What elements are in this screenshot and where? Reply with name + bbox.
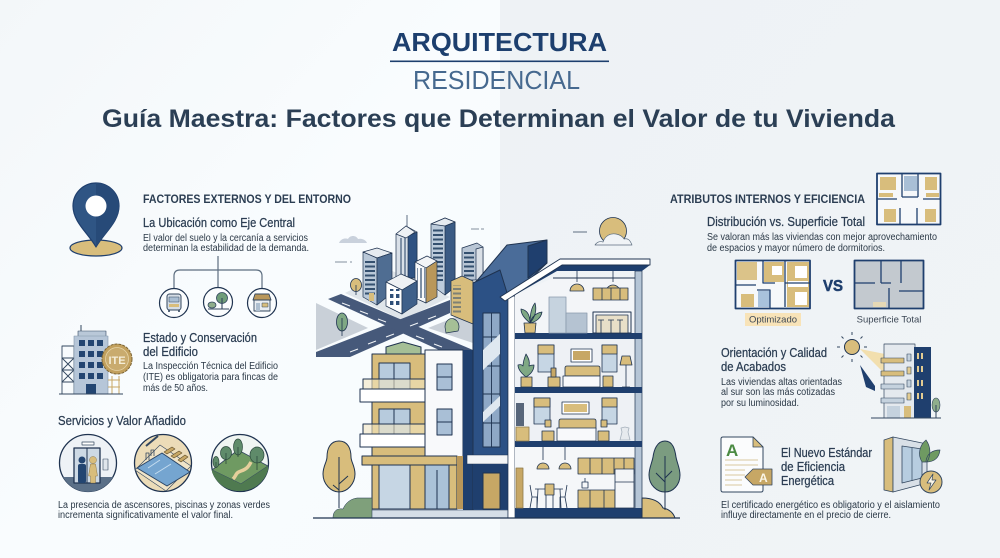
icon: elevator xyxy=(60,434,116,492)
icon: ITE building: ITE xyxy=(108,355,126,367)
heading: external factors: FACTORES EXTERNOS Y DEL ENTORNO xyxy=(143,192,351,206)
text: orientation body xyxy=(721,377,842,409)
subheading: distribution: Distribución vs. Superficie Total xyxy=(707,215,865,229)
text: ITE body: más de 50 años. xyxy=(143,383,208,394)
room: living and kitchen top floor xyxy=(521,271,631,333)
subheading: building condition: del Edificio xyxy=(143,345,198,359)
icon: city trees and cloud xyxy=(335,229,484,336)
city: roads and plots xyxy=(316,270,473,357)
panel: internal attributes xyxy=(670,174,942,521)
subheading: orientation xyxy=(721,346,827,374)
subheading: building condition: Estado y Conservación xyxy=(143,331,257,345)
logo word ARQUITECTURA: ARQUITECTURA xyxy=(392,27,607,57)
subheading: orientation: de Acabados xyxy=(721,360,786,374)
main title: Guía Maestra: Factores que Determinan el Valor de tu Vivienda xyxy=(102,105,896,133)
subheading: location: La Ubicación como Eje Central xyxy=(143,216,295,230)
panel: services xyxy=(58,414,270,521)
icon: green area xyxy=(212,434,268,492)
text: ITE body: La Inspección Técnica del Edificio xyxy=(143,361,278,372)
left building xyxy=(360,342,474,510)
icon: energy certificate: A xyxy=(759,471,768,485)
label: optimized: Optimizado xyxy=(749,314,797,326)
subheading: energy standard: El Nuevo Estándar xyxy=(781,446,872,460)
icon: top floor plan xyxy=(877,174,941,224)
subheading: energy standard: de Eficiencia xyxy=(781,460,845,474)
icon: shop xyxy=(248,288,276,318)
text: services body xyxy=(58,500,270,521)
text: energy body xyxy=(721,500,940,521)
panel: building condition xyxy=(59,325,278,394)
text: energy body: influye directamente en el precio de cierre. xyxy=(721,510,891,521)
label: VS: VS xyxy=(823,278,843,295)
subheading: energy standard xyxy=(781,446,872,488)
icon: bus xyxy=(160,288,188,318)
icon: park xyxy=(204,288,232,316)
icon: ITE building xyxy=(59,325,132,394)
room: bedroom second floor xyxy=(516,398,630,441)
logo word RESIDENCIAL: RESIDENCIAL xyxy=(413,65,580,95)
text: location body xyxy=(143,233,309,254)
room: kitchen ground floor xyxy=(516,447,634,508)
connector lines xyxy=(174,256,262,288)
city: towers xyxy=(363,215,483,333)
heading: internal attributes: ATRIBUTOS INTERNOS Y EFICIENCIA xyxy=(670,192,865,206)
text: orientation body: Las viviendas altas orientadas xyxy=(721,377,842,388)
icon: pool xyxy=(134,434,192,492)
icon: energy certificate: A xyxy=(726,441,738,460)
floor plan: total area xyxy=(854,260,924,309)
icon: insulated window xyxy=(884,437,942,493)
text: services body: incrementa significativamente el valor final. xyxy=(58,510,233,521)
icon: energy certificate xyxy=(721,437,772,492)
icon: right tree xyxy=(642,441,680,518)
subheading: energy standard: Energética xyxy=(781,474,834,488)
text: ITE body: (ITE) es obligatoria para fincas de xyxy=(143,372,278,383)
text: distribution body: Se valoran más las viviendas con mejor aprovechamiento xyxy=(707,232,937,243)
central tower xyxy=(467,240,547,518)
text: orientation body: por su luminosidad. xyxy=(721,398,799,409)
panel: external factors xyxy=(70,183,351,318)
floor plan: optimized xyxy=(736,260,810,308)
icon: sun and cloud xyxy=(573,218,632,245)
text: ITE body xyxy=(143,361,278,394)
central illustration: building and city xyxy=(313,215,680,518)
text: services body: La presencia de ascensores, piscinas y zonas verdes xyxy=(58,500,270,511)
text: location body: determinan la estabilidad de la demanda. xyxy=(143,243,309,254)
icon: location pin xyxy=(70,183,122,256)
header: logo and title xyxy=(102,27,896,133)
text: distribution body xyxy=(707,232,937,254)
ground line xyxy=(313,517,680,519)
steps and entrance xyxy=(352,510,508,518)
label: total area: Superficie Total xyxy=(857,314,921,326)
subheading: services: Servicios y Valor Añadido xyxy=(58,414,186,428)
text: energy body: El certificado energético es obligatorio y el aislamiento xyxy=(721,500,940,511)
subheading: building condition xyxy=(143,331,257,359)
text: orientation body: al sur son las más cotizadas xyxy=(721,387,835,398)
subheading: orientation: Orientación y Calidad xyxy=(721,346,827,360)
right cutaway building xyxy=(500,259,650,518)
icon: sunlit building xyxy=(837,332,941,418)
icon: left tree xyxy=(323,441,372,518)
room: bedroom third floor xyxy=(518,345,632,387)
text: distribution body: de espacios y mayor número de dormitorios. xyxy=(707,243,885,254)
text: location body: El valor del suelo y la cercanía a servicios xyxy=(143,233,308,244)
